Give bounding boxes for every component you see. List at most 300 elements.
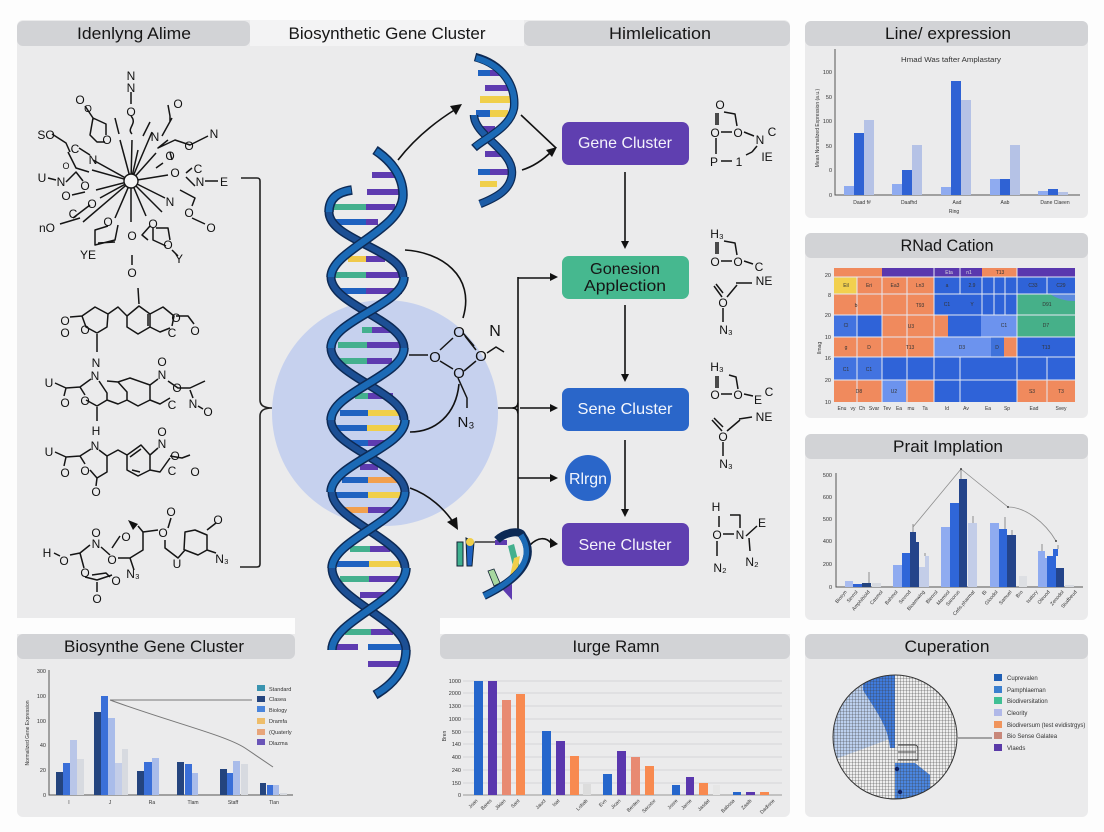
- heatmap: 20: [825, 378, 831, 384]
- molecule: fused ring lower: [45, 425, 200, 499]
- bar chart with trend line: Gloodol: [984, 589, 1000, 606]
- heatmap: D8: [856, 389, 862, 395]
- heatmap: [817, 268, 1075, 412]
- heading: [805, 434, 1088, 459]
- circle: highlight behind helix: [272, 300, 498, 526]
- molecule: radial star compound: O: [87, 197, 97, 211]
- bar chart: Dane Claeen: [1040, 200, 1070, 206]
- molecule: radial star compound: O: [163, 238, 173, 252]
- heatmap: b: [855, 303, 858, 309]
- molecule: side structure 1: C: [768, 125, 777, 139]
- bar chart: Zaaib: [740, 798, 754, 811]
- heatmap: Svar: [869, 406, 879, 412]
- molecule: bottom compound: O: [213, 513, 223, 527]
- molecule: center compound: O: [429, 349, 441, 366]
- node: Sene Cluster blue: Sene Cluster: [578, 401, 673, 418]
- bar chart: Josre: [667, 798, 680, 811]
- bar chart: Daafhd: [901, 200, 917, 206]
- molecule: fused ring middle: U: [45, 376, 53, 390]
- molecule: fused ring lower: O: [91, 485, 101, 499]
- molecule: fused ring lower: O: [170, 449, 180, 463]
- bar chart with trend line: 500: [823, 517, 832, 523]
- molecule: fused ring lower: O: [157, 425, 167, 439]
- bar chart: 1300: [449, 704, 461, 710]
- bar chart with trend line: 600: [823, 495, 832, 501]
- panel: Line/expression: [805, 21, 1088, 218]
- molecule: bottom compound: U: [173, 557, 181, 571]
- heading: [805, 634, 1088, 659]
- molecule: center compound: O: [453, 365, 465, 382]
- arrow down: [621, 440, 629, 517]
- molecule: fused ring middle: [45, 355, 213, 453]
- bar chart: 1000: [449, 717, 461, 723]
- molecule: radial star compound: N: [166, 195, 174, 209]
- heatmap: T13: [1042, 345, 1051, 351]
- molecule: radial star compound: O: [184, 139, 194, 153]
- molecule: side structure 2: O: [710, 255, 720, 269]
- node: Rlrgn circle: [565, 455, 611, 501]
- bar chart: Mean Normalized Expression (a.u.): [815, 88, 821, 167]
- molecule: radial star compound: O: [206, 221, 216, 235]
- legend: Cleority: [1007, 711, 1027, 717]
- molecule: radial star compound: O: [127, 266, 137, 280]
- bar chart: Ra: [149, 800, 155, 806]
- heading: RNad Cation: [900, 236, 994, 255]
- node: Sene Cluster purple: [562, 523, 689, 566]
- molecule: side structure 3: O: [710, 388, 720, 402]
- bar chart: Babosa: [720, 798, 737, 814]
- bar chart: Aab: [1001, 200, 1010, 206]
- heading: Biosynthetic Gene Cluster: Biosynthetic Gene Cluster: [288, 24, 486, 43]
- bar chart: 100: [37, 694, 46, 700]
- heatmap: T13: [996, 270, 1005, 276]
- bar chart: Lobab: [575, 798, 590, 812]
- heatmap: Enu: [838, 406, 847, 412]
- molecule: fused ring middle: O: [80, 394, 90, 408]
- heatmap: C1: [1001, 323, 1007, 329]
- molecule: radial star compound: E: [220, 175, 228, 189]
- molecule: fused ring top: O: [60, 326, 70, 340]
- heatmap: g: [845, 345, 848, 351]
- bar chart with trend line: Sevrod: [898, 589, 913, 605]
- molecule: side structure 3: O: [733, 388, 743, 402]
- bar chart: 300: [37, 669, 46, 675]
- heatmap: Ea: [896, 406, 902, 412]
- node: Rlrgn circle: Rlrgn: [569, 471, 607, 488]
- molecule: radial star compound: N: [57, 175, 65, 189]
- bar chart with trend line: Biosyn: [834, 589, 849, 605]
- panel: Cuperation: [805, 634, 1088, 817]
- heatmap: U3: [908, 324, 914, 330]
- icon: folded protein: [457, 532, 528, 600]
- bar chart: 40: [40, 743, 46, 749]
- panel: main pathway background: [10, 20, 800, 817]
- bar chart: 50: [826, 144, 832, 150]
- molecule: bottom compound: O: [111, 574, 121, 588]
- legend: Pamphlaeman: [1007, 688, 1046, 694]
- bar chart with trend line: Amphibiold: [851, 589, 872, 612]
- molecule: fused ring top: [60, 288, 200, 352]
- molecule: radial star compound: O: [148, 217, 158, 231]
- bar chart: Jasdat: [697, 798, 712, 813]
- bar chart: 400: [452, 755, 461, 761]
- molecule: side structure 1: P: [710, 155, 718, 169]
- molecule: bottom compound: O: [158, 526, 168, 540]
- curved connector: helix to molecule: [405, 250, 466, 318]
- molecule: fused ring lower: O: [190, 465, 200, 479]
- legend: Biodiversitation: [1007, 699, 1048, 705]
- bar chart: 50: [826, 95, 832, 101]
- molecule: fused ring middle: O: [172, 381, 182, 395]
- molecule: bottom compound: O: [166, 505, 176, 519]
- molecule: side structure 1: O: [710, 126, 720, 140]
- node: Sene Cluster purple: Sene Cluster: [578, 537, 672, 554]
- bar chart: Bares: [480, 798, 494, 812]
- bar chart with trend line: Sanorus: [945, 589, 962, 608]
- bar chart with trend line: Oleuod: [1037, 589, 1052, 606]
- heatmap: Eta: [945, 270, 953, 276]
- node: Gene Cluster purple: Gene Cluster: [578, 135, 673, 152]
- molecule: radial star compound: YE: [80, 248, 96, 262]
- molecule: radial star compound: C: [69, 207, 78, 221]
- bar chart with trend line: 400: [823, 539, 832, 545]
- bar chart with trend line: Bi: [981, 589, 989, 597]
- bar chart with trend line: Bahmol: [884, 589, 900, 606]
- molecule: side structure 4: N₂: [713, 561, 727, 575]
- heatmap: Eri: [866, 283, 872, 289]
- molecule: radial star compound: C: [71, 142, 80, 156]
- legend: Bio Sense Galatea: [1007, 734, 1058, 740]
- arrow: helix to protein: [410, 488, 458, 530]
- molecule: fused ring lower: C: [168, 464, 177, 478]
- bar chart with trend line: Bioamwing: [906, 589, 927, 612]
- legend: Biodiversum (test evidistrgys): [1007, 723, 1085, 729]
- bar chart: Joan: [468, 798, 480, 810]
- molecule: radial star compound: O: [80, 179, 90, 193]
- molecule: center compound: N: [489, 323, 501, 340]
- bar chart with trend line: 200: [823, 562, 832, 568]
- bar chart: [815, 49, 1080, 215]
- heading: Prait Implation: [893, 437, 1003, 456]
- bar chart: Sacotor: [641, 798, 658, 815]
- node: Gonesion Applection green: Applection: [584, 278, 666, 295]
- bar chart: Tlam: [187, 800, 199, 806]
- molecule: bottom compound: O: [91, 526, 101, 540]
- molecule: fused ring lower: N: [158, 437, 166, 451]
- molecule: radial star compound: O: [184, 206, 194, 220]
- molecule: radial star compound: O: [170, 166, 180, 180]
- molecule: radial star compound: O: [75, 93, 85, 107]
- arrow down: [621, 172, 629, 249]
- molecule: side structure 3: [710, 360, 774, 471]
- heading: Line/ expression: [885, 24, 1011, 43]
- molecule: side structure 3: NE: [756, 410, 772, 424]
- molecule: fused ring top: O: [60, 314, 70, 328]
- node: Gonesion Applection green: [562, 256, 689, 299]
- legend: [257, 685, 292, 747]
- molecule: radial star compound: N: [210, 127, 218, 141]
- molecule: side structure 4: [712, 500, 766, 575]
- molecule: bottom compound: O: [59, 554, 69, 568]
- heatmap: D3: [959, 345, 965, 351]
- legend: Cuprevalen: [1007, 676, 1038, 682]
- legend: Vlaeds: [1007, 746, 1025, 752]
- grid circle map: [833, 675, 992, 800]
- bar chart: 0: [829, 193, 832, 199]
- molecule: fused ring middle: O: [203, 405, 213, 419]
- node: Gene Cluster purple: [562, 122, 689, 165]
- heatmap: Cl: [844, 323, 848, 329]
- molecule: radial star compound: O: [173, 97, 183, 111]
- legend: Standard: [269, 687, 291, 693]
- heading: Biosynthe Gene Cluster: [64, 637, 244, 656]
- heatmap: a: [946, 283, 949, 289]
- heading: Cuperation: [904, 637, 990, 656]
- molecule: radial star compound: U: [38, 171, 46, 185]
- molecule: side structure 2: [710, 227, 772, 337]
- bar chart: 1000: [449, 679, 461, 685]
- DNA helix: main: [329, 150, 406, 695]
- molecule: side structure 3: E: [754, 393, 762, 407]
- molecule: side structure 2: C: [755, 260, 764, 274]
- molecule: center compound: N₃: [458, 414, 474, 431]
- molecule: fused ring top: C: [168, 326, 177, 340]
- molecule: side structure 2: O: [718, 296, 728, 310]
- bar chart: 140: [452, 742, 461, 748]
- heatmap: Sp: [1004, 406, 1010, 412]
- brace and branching arrows: [498, 273, 558, 548]
- bar chart: 0: [43, 793, 46, 799]
- molecule: fused ring lower: O: [80, 464, 90, 478]
- molecule: bottom compound: N₃: [215, 552, 229, 566]
- molecule: side structure 4: O: [712, 528, 722, 542]
- heading: [805, 21, 1088, 46]
- bar chart: Aad: [953, 200, 962, 206]
- bar chart with trend line: Bro: [1015, 589, 1025, 599]
- molecule: radial star compound: O: [61, 189, 71, 203]
- bar chart: Jican: [610, 798, 623, 811]
- molecule: fused ring middle: N: [189, 397, 197, 411]
- heatmap: mu: [908, 406, 915, 412]
- molecule: bottom compound: H: [43, 546, 51, 560]
- bar chart: I: [68, 800, 70, 806]
- bar chart: 100: [37, 719, 46, 725]
- bar chart: 20: [40, 768, 46, 774]
- heatmap: Ln3: [916, 283, 924, 289]
- molecule: radial star compound: O: [84, 104, 92, 115]
- bar chart: Dadlone: [759, 798, 777, 816]
- molecule: fused ring top: O: [190, 324, 200, 338]
- heatmap: D91: [1042, 302, 1052, 308]
- heatmap: S3: [1029, 389, 1035, 395]
- panel: Prait Implation: [805, 434, 1088, 620]
- heatmap: Y: [970, 302, 974, 308]
- bar chart: Ring: [949, 209, 959, 215]
- heatmap: 2.9: [969, 283, 976, 289]
- heatmap: D: [867, 345, 871, 351]
- heatmap: Ead: [1030, 406, 1039, 412]
- heading: [17, 634, 295, 659]
- heading: Himlelication: [524, 21, 790, 46]
- heatmap: C1: [843, 367, 849, 373]
- legend: (Quaterly: [269, 730, 292, 736]
- bar chart: Daad f#: [853, 200, 871, 206]
- molecule: center compound: O: [475, 348, 487, 365]
- molecule: radial star compound: N: [89, 153, 97, 167]
- molecule: side structure 1: N: [756, 133, 764, 147]
- bar chart with trend line: Sevrol: [846, 589, 860, 604]
- heading: Iurge Ramn: [572, 637, 660, 656]
- DNA helix: small fragment: [474, 57, 514, 204]
- bar chart: Jarne: [680, 798, 694, 811]
- molecule: side structure 4: N₂: [745, 555, 759, 569]
- bar chart: Staff: [228, 800, 239, 806]
- molecule: bottom compound: O: [121, 530, 131, 544]
- heatmap: Ch: [859, 406, 865, 412]
- panel: Biosynthe Gene Cluster: [17, 634, 295, 806]
- heatmap: D7: [1043, 323, 1049, 329]
- bar chart: 2000: [449, 691, 461, 697]
- bar chart: Normalized Gene Expression: [25, 700, 31, 766]
- molecule: side structure 2: N₃: [719, 323, 733, 337]
- heatmap: U2: [891, 389, 897, 395]
- molecule: radial star compound: O: [62, 161, 70, 171]
- base pairs: [333, 172, 405, 667]
- bar chart: Bren: [442, 731, 448, 741]
- bar chart with trend line: [823, 468, 1083, 617]
- legend: [994, 674, 1085, 752]
- molecule: bottom compound: N: [92, 537, 100, 551]
- molecule: bottom compound: O: [107, 553, 117, 567]
- heatmap: Svey: [1055, 406, 1067, 412]
- bar chart: [442, 679, 782, 816]
- bar chart with trend line: 0: [829, 585, 832, 591]
- legend: Clasea: [269, 697, 287, 703]
- molecule: side structure 4: N: [736, 528, 744, 542]
- heatmap: 8: [828, 293, 831, 299]
- molecule: bottom compound: O: [92, 592, 102, 606]
- heatmap: Av: [963, 406, 969, 412]
- panel: Iurge Ramn: [440, 634, 790, 816]
- heatmap: Tev: [883, 406, 891, 412]
- bar chart with trend line: Zenodol: [1049, 589, 1066, 607]
- heatmap: D: [995, 345, 999, 351]
- molecule: side structure 1: IE: [761, 150, 773, 164]
- molecule: fused ring middle: O: [157, 355, 167, 369]
- bar chart with trend line: Studbeud: [1060, 589, 1079, 610]
- molecule: radial star compound: N: [127, 81, 135, 95]
- bar chart: Hmad Was tafter Amplastary: [901, 57, 1002, 64]
- bar chart with trend line: Isatory: [1025, 589, 1040, 605]
- bar chart: J: [109, 800, 112, 806]
- heatmap: n1: [966, 270, 972, 276]
- molecule: radial star compound: O: [126, 105, 136, 119]
- panel: RNad Cation: [805, 233, 1088, 418]
- bar chart with trend line: Casmol: [869, 589, 885, 606]
- back strand: [329, 212, 406, 650]
- molecule: radial star compound: nO: [39, 221, 55, 235]
- molecule: fused ring middle: O: [60, 396, 70, 410]
- heatmap: C1: [866, 367, 872, 373]
- bar chart: Benteo: [626, 798, 642, 814]
- molecule: side structure 1: O: [715, 98, 725, 112]
- molecule: side structure 2: NE: [756, 274, 772, 288]
- bracket: left molecules to helix: [240, 178, 272, 567]
- heading: Idenlyng Alime: [17, 21, 250, 46]
- molecule: fused ring middle: H: [92, 424, 100, 438]
- heading: Himlelication: Himlelication: [609, 24, 711, 43]
- molecule: side structure 4: H: [712, 500, 720, 514]
- molecule: radial star compound: O: [127, 229, 137, 243]
- legend: Dlazma: [269, 741, 289, 747]
- molecule: radial star compound: C: [194, 162, 203, 176]
- bar chart with trend line: Samuel: [998, 589, 1014, 606]
- heatmap: Ta: [922, 406, 928, 412]
- node: Gonesion Applection green: Gonesion: [590, 261, 660, 278]
- heading: [440, 634, 790, 659]
- heatmap: Ea: [985, 406, 991, 412]
- heading: [805, 233, 1088, 258]
- molecule: bottom compound: [43, 505, 229, 606]
- molecule: radial star compound: Y: [175, 252, 183, 266]
- molecule: center compound: [409, 323, 504, 432]
- heading: Idenlyng Alime: Idenlyng Alime: [77, 24, 191, 43]
- heatmap: T13: [906, 345, 915, 351]
- bar chart: Tlan: [269, 800, 279, 806]
- molecule: fused ring middle: C: [168, 398, 177, 412]
- bar chart: 500: [452, 730, 461, 736]
- bar chart: 100: [823, 70, 832, 76]
- heatmap: Id: [945, 406, 949, 412]
- molecule: fused ring middle: N: [158, 368, 166, 382]
- molecule: side structure 1: [710, 98, 777, 169]
- molecule: radial star compound: O: [102, 133, 112, 147]
- heatmap: 10: [825, 400, 831, 406]
- heatmap: vy: [850, 406, 856, 412]
- molecule: side structure 3: O: [718, 430, 728, 444]
- bar chart: Isat: [551, 798, 562, 808]
- bar chart: 240: [452, 768, 461, 774]
- bar chart: 0: [458, 793, 461, 799]
- heatmap: C1: [944, 302, 950, 308]
- molecule: radial star compound: N: [127, 69, 135, 83]
- bar chart: 150: [452, 781, 461, 787]
- legend: Biology: [269, 708, 287, 714]
- molecule: fused ring middle: N: [91, 439, 99, 453]
- molecule: side structure 1: O: [733, 126, 743, 140]
- bar chart: Evn: [598, 798, 609, 809]
- molecule: bottom compound: O: [80, 566, 90, 580]
- heatmap: Ea3: [891, 283, 900, 289]
- molecule: side structure 4: E: [758, 516, 766, 530]
- heatmap: T3: [1058, 389, 1064, 395]
- node: Sene Cluster blue: [562, 388, 689, 431]
- molecule: side structure 2: H₃: [710, 227, 724, 241]
- molecule: center compound: O: [453, 324, 465, 341]
- heatmap: C33: [1028, 283, 1038, 289]
- molecule: radial star compound: O: [103, 215, 113, 229]
- bar chart with trend line: 500: [823, 473, 832, 479]
- heatmap: 16: [825, 356, 831, 362]
- molecule: fused ring middle: N: [91, 369, 99, 383]
- bar chart with trend line: Blenrol: [925, 589, 940, 605]
- bar chart: Jikian: [494, 798, 508, 811]
- molecule: bottom compound: N₃: [126, 567, 140, 581]
- bar chart: [25, 669, 293, 806]
- arrow down: [621, 305, 629, 382]
- heatmap: Ilmag: [817, 342, 823, 354]
- molecule: radial star compound: SO: [37, 128, 55, 142]
